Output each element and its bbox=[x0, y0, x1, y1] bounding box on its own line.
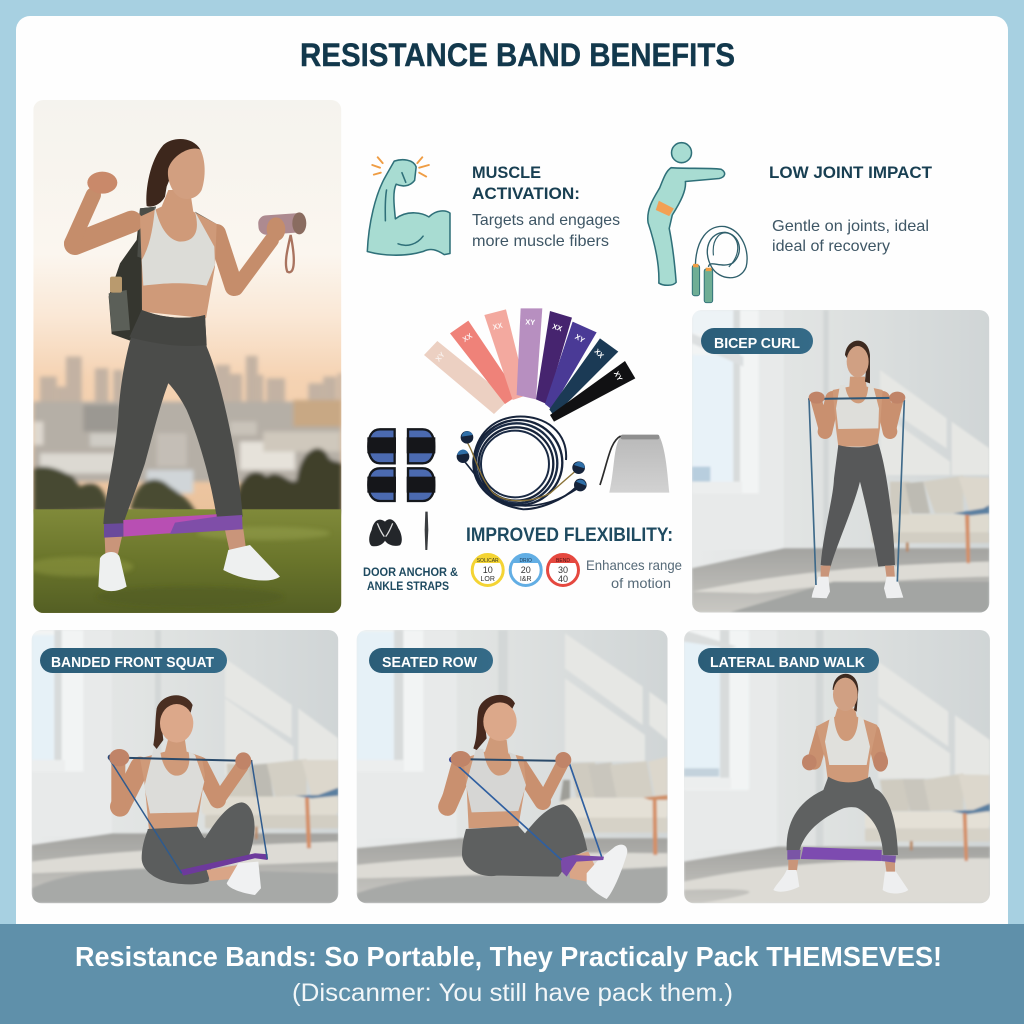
label pill: banded front squat bbox=[40, 648, 227, 673]
label pill: seated row: SEATED ROW bbox=[382, 654, 478, 671]
text: enhances range of motion: of motion bbox=[611, 575, 671, 591]
panel: bicep curl photo bbox=[692, 310, 989, 613]
sneakers bbox=[98, 545, 280, 591]
text: low joint impact: ideal of recovery bbox=[772, 238, 890, 255]
lower legs bbox=[105, 529, 246, 554]
equipment: coiled resistance cables bbox=[457, 417, 587, 509]
text: low joint impact bbox=[769, 163, 933, 255]
sofa bbox=[880, 779, 909, 811]
resistance band bbox=[787, 847, 896, 863]
resistance band and handle bbox=[449, 751, 604, 877]
sports top bbox=[836, 383, 879, 429]
equipment: fan of loop bands: XX bbox=[492, 321, 504, 332]
resistance level badges: 10 bbox=[483, 565, 493, 575]
panel: hero photo of woman with backpack at sunset bbox=[27, 100, 342, 613]
equipment: fan of loop bands: XY bbox=[612, 370, 624, 383]
footer disclaimer: (Discanmer: You still have pack them.) bbox=[292, 979, 733, 1007]
equipment: fan of loop bands: XY bbox=[434, 350, 447, 363]
torso bbox=[816, 708, 877, 784]
hair and ponytail bbox=[146, 139, 201, 207]
resistance level badges: 20 bbox=[521, 565, 531, 575]
ankles bbox=[788, 860, 895, 873]
footer headline: Resistance Bands: So Portable, They Practicaly Pack THEMSEVES! bbox=[75, 941, 942, 972]
label: door anchor and ankle straps bbox=[363, 565, 458, 593]
resistance band bbox=[809, 398, 904, 585]
sports top bbox=[144, 749, 204, 813]
head and hair bbox=[845, 341, 870, 383]
backpack bbox=[109, 207, 219, 341]
equipment: fan of loop bands: XX bbox=[551, 322, 563, 333]
head bbox=[168, 149, 205, 199]
equipment: fan of loop bands: XY bbox=[573, 332, 586, 345]
leggings bbox=[462, 804, 587, 877]
leggings bbox=[787, 777, 898, 855]
resistance level badges bbox=[472, 554, 578, 586]
equipment: ankle straps bbox=[367, 429, 435, 501]
text: muscle activation bbox=[472, 163, 620, 250]
footer banner bbox=[0, 924, 1024, 1024]
label pill: bicep curl bbox=[701, 328, 813, 354]
foot and shoe bbox=[568, 845, 627, 899]
equipment: fan of loop bands bbox=[424, 308, 635, 422]
resistance level badges: SOLICAR bbox=[477, 558, 499, 564]
label pill: lateral band walk bbox=[698, 648, 879, 673]
panel: banded front squat photo bbox=[32, 630, 338, 903]
sports top bbox=[825, 714, 870, 765]
equipment: door anchor and pin bbox=[369, 512, 428, 550]
equipment: fan of loop bands: XX bbox=[593, 347, 606, 360]
text: enhances range of motion bbox=[586, 557, 682, 591]
arms bbox=[118, 763, 242, 807]
text: muscle activation: MUSCLE bbox=[472, 163, 541, 182]
label: door anchor and ankle straps: ANKLE STRAPS bbox=[367, 579, 449, 593]
head and hair bbox=[153, 695, 193, 749]
equipment: fan of loop bands: XX bbox=[461, 331, 474, 344]
panel: seated row photo bbox=[357, 630, 668, 903]
label pill: seated row bbox=[369, 648, 493, 673]
text: low joint impact: LOW JOINT IMPACT bbox=[769, 163, 933, 182]
head and hair bbox=[833, 674, 858, 712]
left arm and fist bbox=[72, 172, 132, 244]
icon: figure with hip band and jump rope bbox=[648, 143, 747, 303]
sports top bbox=[466, 748, 526, 812]
sofa bbox=[227, 763, 255, 797]
rolled yoga mat bbox=[258, 212, 306, 272]
leggings bbox=[103, 310, 243, 524]
icon: flexed muscle arm bbox=[367, 157, 450, 255]
text: enhances range of motion: Enhances range bbox=[586, 557, 682, 573]
resistance level badges: BEND bbox=[556, 558, 570, 564]
panel: lateral band walk photo bbox=[684, 630, 990, 903]
sneakers bbox=[773, 870, 908, 893]
torso bbox=[140, 738, 205, 830]
label: door anchor and ankle straps: DOOR ANCHOR & bbox=[363, 565, 458, 579]
text: low joint impact: Gentle on joints, ideal bbox=[772, 218, 929, 235]
text: muscle activation: Targets and engages bbox=[472, 212, 620, 229]
equipment: fan of loop bands: XY bbox=[525, 317, 536, 327]
title: RESISTANCE BAND BENEFITS bbox=[300, 37, 735, 73]
resistance level badges: 40 bbox=[558, 574, 568, 584]
ankles and shoes bbox=[821, 566, 895, 578]
label pill: banded front squat: BANDED FRONT SQUAT bbox=[51, 654, 214, 671]
text: muscle activation: ACTIVATION: bbox=[472, 184, 580, 203]
equipment: drawstring pouch bbox=[600, 435, 669, 493]
resistance level badges: 30 bbox=[558, 565, 568, 575]
arms bbox=[446, 763, 562, 808]
sports top bbox=[142, 207, 215, 286]
sofa bbox=[570, 762, 595, 798]
resistance level badges: DRIO bbox=[519, 558, 532, 564]
leggings bbox=[142, 802, 255, 884]
foot and shoe bbox=[207, 862, 261, 895]
arms and fists bbox=[802, 732, 888, 772]
torso bbox=[463, 737, 526, 828]
resistance level badges: I&R bbox=[520, 576, 532, 583]
right arm and hand bbox=[217, 233, 272, 288]
arms bbox=[817, 398, 897, 432]
text: muscle activation: more muscle fibers bbox=[472, 233, 609, 250]
leggings bbox=[821, 443, 895, 567]
sofa bbox=[890, 482, 910, 515]
label pill: lateral band walk: LATERAL BAND WALK bbox=[710, 654, 865, 671]
heading: improved flexibility: IMPROVED FLEXIBILITY: bbox=[466, 525, 673, 546]
head and hair bbox=[473, 695, 515, 750]
resistance band and handle bbox=[108, 749, 268, 876]
torso bbox=[833, 377, 883, 447]
resistance band at ankles bbox=[104, 514, 243, 538]
label pill: bicep curl: BICEP CURL bbox=[714, 335, 800, 352]
resistance level badges: LOR bbox=[480, 576, 495, 583]
torso bbox=[140, 190, 217, 318]
